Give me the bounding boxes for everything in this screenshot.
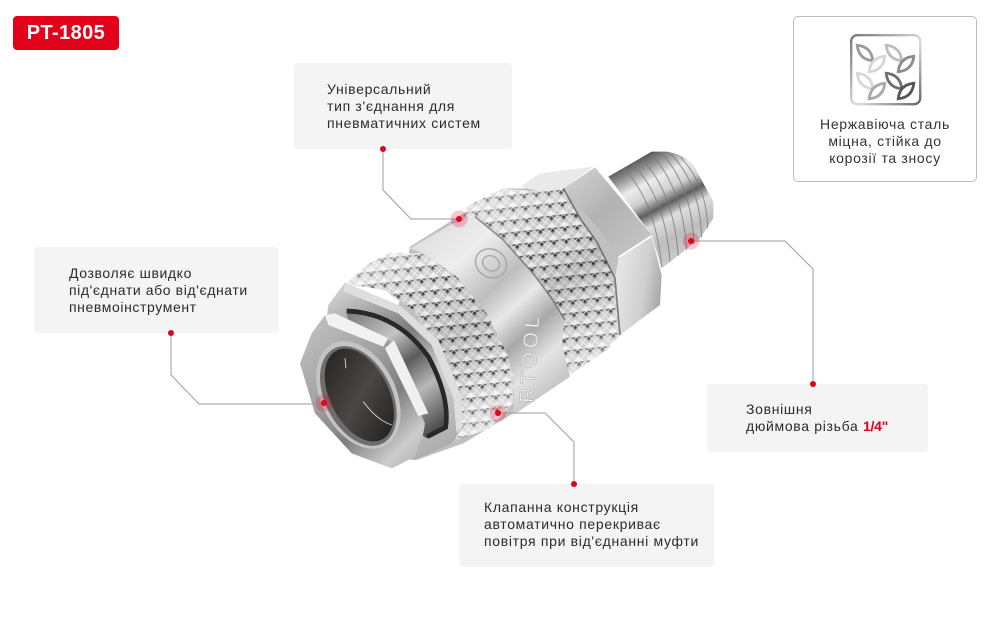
- bore: [299, 327, 418, 463]
- text: stainless steel description: Нержавіюча сталь: [820, 116, 950, 132]
- front hex nut: [300, 313, 428, 468]
- nut highlight: top flat: [325, 313, 388, 347]
- leader: quick connect: [168, 330, 332, 412]
- text: stainless steel description: [820, 116, 950, 166]
- engraved logo: [470, 243, 512, 283]
- panel: universal connection type: пневматичних систем: [327, 115, 481, 131]
- panel: external thread: [707, 384, 928, 452]
- leader: universal connection: [380, 146, 468, 228]
- lower collar and sleeve underlay: [390, 188, 620, 460]
- front ring: [317, 283, 463, 460]
- panel: valve design: автоматично перекриває: [484, 516, 661, 532]
- panel: universal connection type: Універсальний: [327, 81, 431, 97]
- badge: product code: PT-1805: [27, 22, 105, 44]
- panel: stainless steel: [793, 16, 977, 182]
- panel: external thread: Зовнішня: [746, 401, 813, 417]
- front knurled sleeve: [347, 253, 514, 440]
- leader: valve design: [490, 404, 577, 487]
- panel: quick connect: Дозволяє швидко: [69, 265, 192, 281]
- engraved brand text: RTOOL: [515, 312, 545, 404]
- panel: quick connect: [34, 247, 279, 333]
- thread: [608, 152, 713, 268]
- middle smooth band: [410, 217, 570, 415]
- text: stainless steel description: корозії та зносу: [829, 150, 941, 166]
- panel: universal connection type: тип з'єднання для: [327, 98, 455, 114]
- panel: valve design: [459, 484, 714, 567]
- rear knurled sleeve: [463, 188, 620, 403]
- inner chrome and dark groove: [347, 311, 446, 438]
- text: stainless steel description: міцна, стійка до: [828, 133, 942, 149]
- panel: valve design: Клапанна конструкція: [484, 499, 639, 515]
- badge: product code: [13, 16, 119, 50]
- leader: external thread: [682, 232, 816, 387]
- panel: valve design: повітря при від'єднанні муфти: [484, 533, 699, 549]
- panel: quick connect: пневмоінструмент: [69, 299, 197, 315]
- icon: stainless steel leaves: [850, 34, 922, 106]
- panel: external thread: дюймова різьба 1/4": [746, 418, 888, 434]
- nut highlight: right flat: [385, 340, 428, 416]
- hex nut body: [520, 167, 662, 335]
- panel: quick connect: під'єднати або від'єднати: [69, 282, 248, 298]
- panel: universal connection type: [294, 63, 512, 149]
